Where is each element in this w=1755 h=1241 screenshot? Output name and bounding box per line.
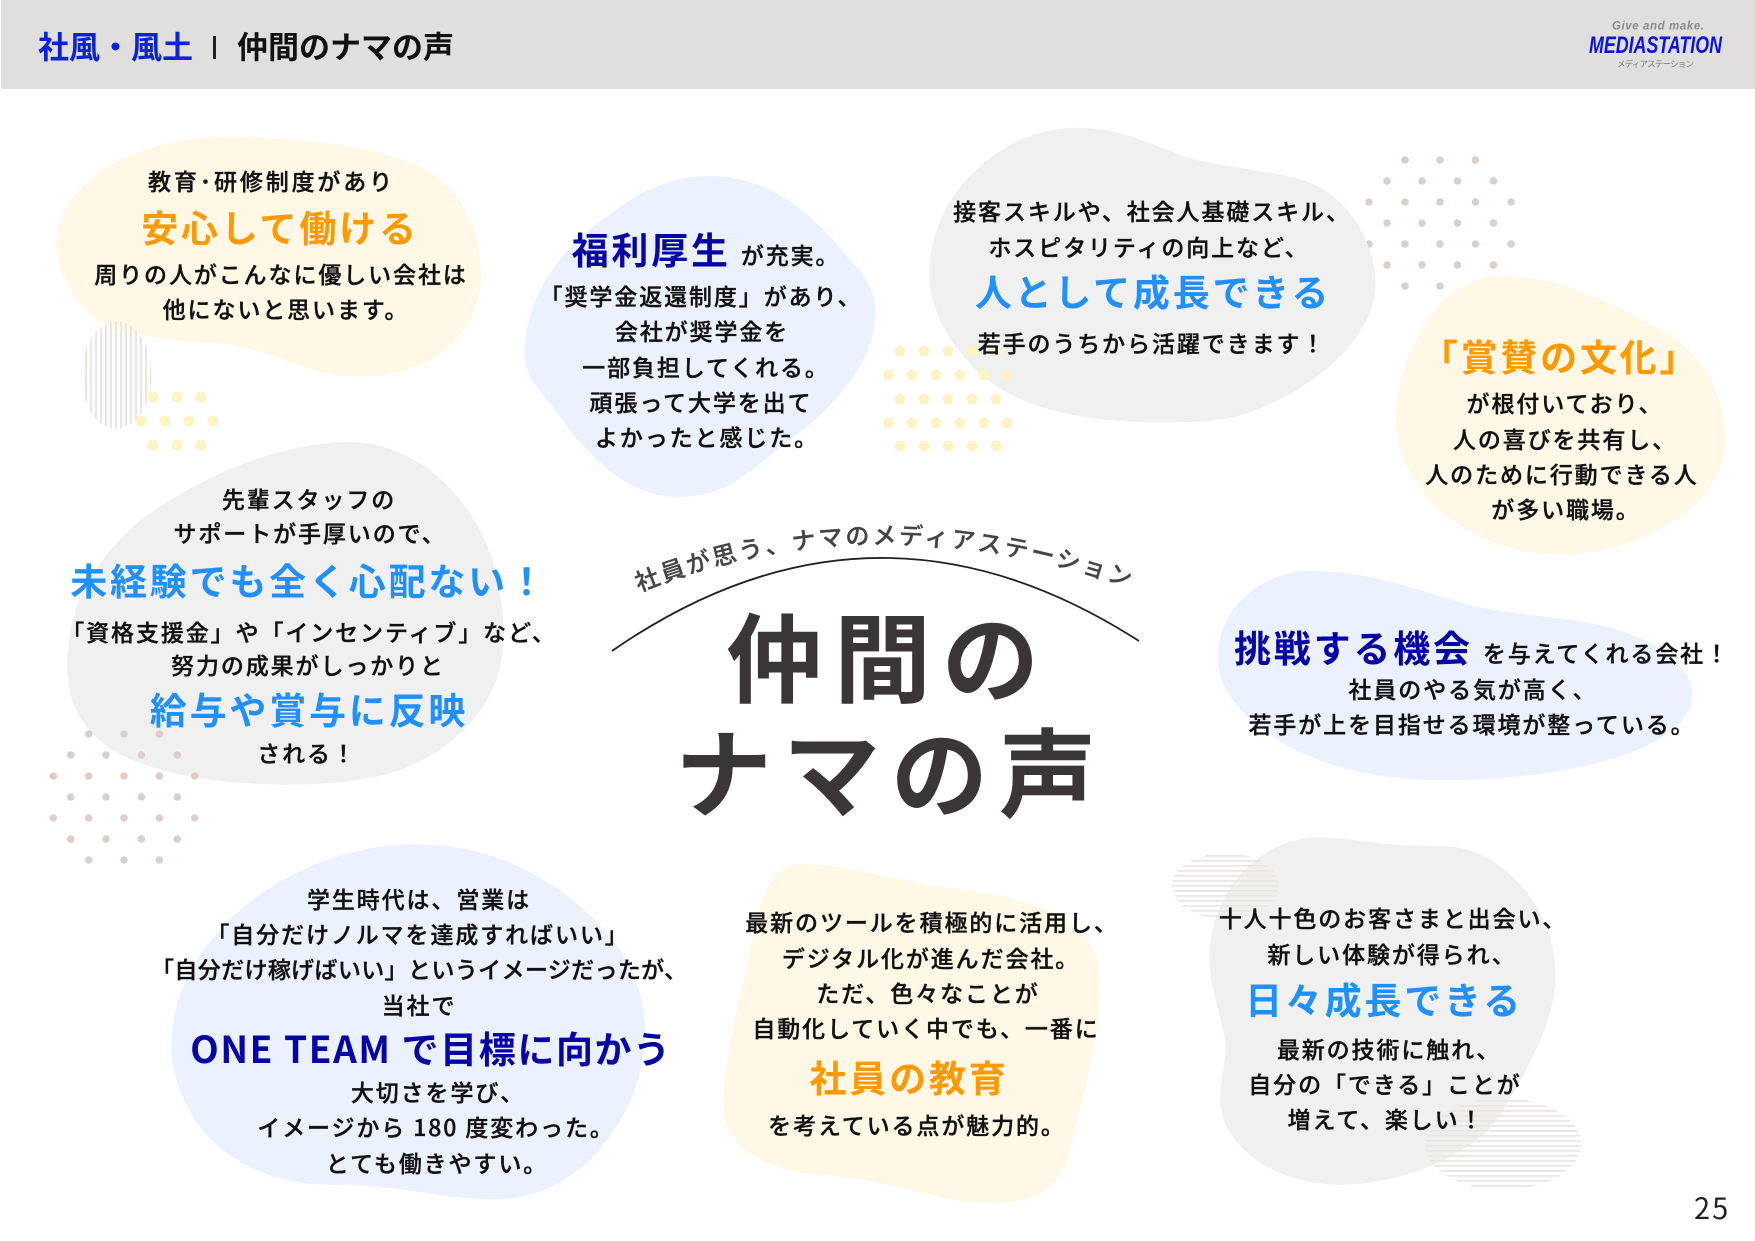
header title	[38, 22, 454, 68]
panel: no experience needed (gray): 給与や賞与に反映	[150, 681, 468, 735]
header title: 仲間のナマの声	[237, 22, 454, 68]
panel: challenge opportunity (blue): 挑戦する機会 を与えてくれる会社！	[1234, 619, 1730, 673]
panel: daily growth (gray): 自分の「できる」ことが	[1248, 1066, 1522, 1100]
panel: culture of praise (yellow): 人の喜びを共有し、	[1453, 421, 1677, 455]
panel: welfare (blue): よかったと感じた。	[595, 419, 819, 453]
panel: one team (blue): 当社で	[382, 987, 456, 1021]
panel: safe to work (yellow): 教育･研修制度があり	[148, 163, 394, 197]
panel: personal growth (gray): 接客スキルや、社会人基礎スキル、	[953, 193, 1351, 227]
panel: staff education (yellow): 社員の教育	[810, 1049, 1008, 1103]
panel: staff education (yellow): 自動化していく中でも、一番に	[752, 1010, 1100, 1044]
center heading: voices of colleagues: ナマの声	[675, 697, 1107, 838]
panel: daily growth (gray): 増えて、楽しい！	[1288, 1101, 1484, 1135]
panel: one team (blue)	[151, 844, 689, 1199]
panel: no experience needed (gray): 努力の成果がしっかりと	[171, 647, 445, 681]
curved subtitle	[639, 544, 1146, 594]
panel: culture of praise (yellow): 人のために行動できる人	[1425, 456, 1699, 490]
panel: welfare (blue): 「奨学金返還制度」があり、	[540, 278, 862, 312]
panel: no experience needed (gray): 未経験でも全く心配ない！	[70, 552, 548, 606]
center heading: voices of colleagues	[612, 524, 1140, 838]
panel: staff education (yellow)	[723, 864, 1119, 1203]
panel: safe to work (yellow): 他にないと思います。	[163, 291, 409, 325]
panel: culture of praise (yellow)	[1396, 276, 1725, 554]
panel: welfare (blue): 福利厚生 が充実。	[572, 221, 840, 275]
header title: 社風・風土	[38, 22, 193, 68]
panel: staff education (yellow): デジタル化が進んだ会社。	[782, 940, 1080, 974]
panel: culture of praise (yellow): が根付いており、	[1467, 385, 1663, 419]
decoration: yellow dots	[136, 392, 218, 450]
panel: no experience needed (gray): 「資格支援金」や「インセンティブ」など、	[61, 614, 557, 648]
panel: safe to work (yellow): 周りの人がこんなに優しい会社は	[94, 256, 468, 290]
panel: culture of praise (yellow): が多い職場。	[1491, 491, 1641, 525]
decoration: horizontal stripe ellipse lower	[1425, 1098, 1581, 1190]
panel: safe to work (yellow)	[56, 137, 481, 451]
panel: one team (blue): 大切さを学び、	[351, 1074, 525, 1108]
panel: no experience needed (gray): 先輩スタッフの	[222, 481, 396, 515]
decoration: horizontal stripe ellipse upper	[1172, 853, 1279, 919]
decoration: vertical stripe ellipse	[82, 321, 152, 429]
panel: welfare (blue): 一部負担してくれる。	[582, 349, 830, 383]
panel: safe to work (yellow): 安心して働ける	[141, 199, 419, 253]
panel: one team (blue): 学生時代は、営業は	[307, 881, 531, 915]
panel: challenge opportunity (blue)	[1218, 571, 1730, 780]
panel: daily growth (gray): 十人十色のお客さまと出会い、	[1219, 900, 1567, 934]
center heading: voices of colleagues: 社員が思う、ナマのメディアステーション	[634, 524, 1131, 592]
main title: 仲間の	[726, 582, 1050, 723]
panel: welfare (blue)	[525, 176, 875, 497]
arc line	[612, 558, 1139, 651]
dot pattern: top right taupe	[1365, 156, 1515, 290]
panel: personal growth (gray)	[883, 128, 1376, 452]
logo: Media Station: メディアステーション	[1617, 58, 1694, 70]
panel: welfare (blue): 会社が奨学金を	[615, 313, 789, 347]
panel: staff education (yellow): を考えている点が魅力的。	[768, 1107, 1066, 1141]
decoration: taupe dots left	[50, 730, 198, 864]
panel: personal growth (gray): 若手のうちから活躍できます！	[978, 325, 1326, 359]
panel: daily growth (gray): 新しい体験が得られ、	[1267, 936, 1517, 970]
panel: culture of praise (yellow): 「賞賛の文化」	[1421, 328, 1699, 382]
logo: Media Station: Give and make.	[1612, 20, 1704, 32]
panel: one team (blue): ONE TEAM で目標に向かう	[190, 1020, 672, 1074]
panel: staff education (yellow): ただ、色々なことが	[816, 975, 1040, 1009]
page number: 25	[1694, 1186, 1730, 1228]
panel: challenge opportunity (blue): 若手が上を目指せる環境が整っている。	[1248, 706, 1696, 740]
panel: welfare (blue): 頑張って大学を出て	[590, 384, 812, 418]
panel: staff education (yellow): 最新のツールを積極的に活用し、	[745, 904, 1119, 938]
panel: challenge opportunity (blue): 社員のやる気が高く、	[1348, 671, 1598, 705]
decoration: yellow dots center	[883, 346, 1012, 452]
panel: one team (blue): とても働きやすい。	[326, 1145, 548, 1179]
panel: no experience needed (gray): される！	[257, 735, 357, 769]
header bar	[1, 0, 1755, 89]
panel: one team (blue): イメージから 180 度変わった。	[257, 1109, 615, 1143]
panel: daily growth (gray): 日々成長できる	[1245, 971, 1523, 1025]
panel: no experience needed (gray): サポートが手厚いので、	[174, 515, 446, 549]
panel: personal growth (gray): ホスピタリティの向上など、	[988, 229, 1310, 263]
panel: one team (blue): 「自分だけノルマを達成すればいい」	[206, 916, 630, 950]
panel: one team (blue): 「自分だけ稼げばいい」というイメージだったが、	[151, 951, 689, 985]
logo: Media Station	[1589, 20, 1722, 70]
panel: daily growth (gray)	[1172, 837, 1581, 1190]
panel: daily growth (gray): 最新の技術に触れ、	[1277, 1031, 1501, 1065]
panel: no experience needed (gray)	[50, 442, 557, 864]
panel: personal growth (gray): 人として成長できる	[975, 263, 1331, 317]
